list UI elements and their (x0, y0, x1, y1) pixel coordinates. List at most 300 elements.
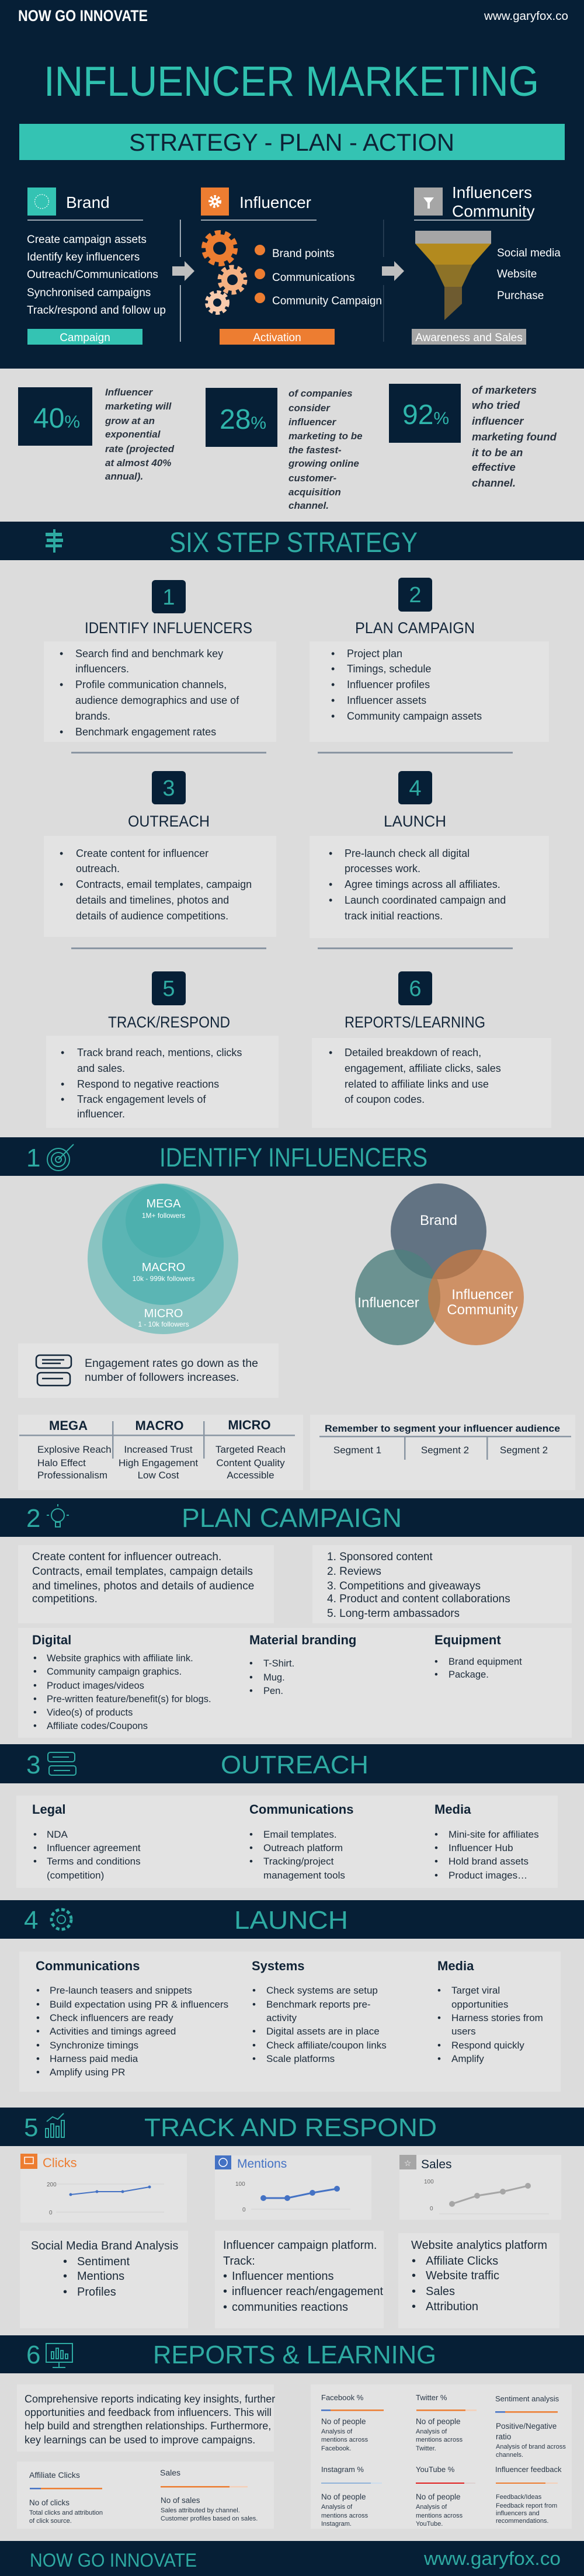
stat 28: acquisition (288, 487, 341, 498)
segment box: Remember to segment your influencer audience (325, 1423, 560, 1434)
step 3: details and timelines, photos and (76, 894, 229, 906)
stat 40: rate (projected (105, 443, 175, 454)
channel metrics: channels. (496, 2452, 523, 2459)
stat 40: 40% (33, 403, 80, 434)
step 2: Community campaign assets (347, 710, 482, 722)
track text 3: • (412, 2300, 416, 2313)
outreach panel: (competition) (47, 1870, 104, 1881)
plan assets panel: Pre-written feature/benefit(s) for blogs. (47, 1694, 211, 1704)
plan intro: competitions. (32, 1593, 98, 1605)
reports intro: help build and strengthen relationships. Furthermore, (25, 2420, 271, 2432)
column: community: Awareness and Sales (415, 332, 523, 344)
track text 1: Social Media Brand Analysis (31, 2240, 178, 2252)
chart: clicks: 0 (49, 2210, 53, 2216)
icon: gear box (201, 188, 229, 216)
launch panel: Digital assets are in place (266, 2026, 380, 2037)
channel metrics: Feedback report from (496, 2502, 557, 2509)
step 4: • (329, 894, 332, 906)
launch header (0, 1900, 584, 1939)
step 3: Contracts, email templates, campaign (76, 879, 252, 890)
plan assets panel: Mug. (263, 1672, 285, 1683)
step 4: • (329, 848, 332, 859)
launch panel: opportunities (451, 1999, 508, 2010)
tier circles: MACRO (142, 1261, 185, 1274)
stat 28: of companies (288, 388, 353, 399)
step 2 (310, 578, 549, 742)
track text 1: Sentiment (77, 2255, 130, 2268)
venn diagram: Influencer (357, 1295, 419, 1311)
chart: clicks: Clicks (43, 2155, 77, 2170)
footer (0, 2541, 584, 2576)
tier table: Increased Trust (124, 1444, 193, 1455)
channel metrics: YouTube % (416, 2465, 455, 2474)
plan header (0, 1498, 584, 1537)
step 3: details of audience competitions. (76, 910, 228, 922)
plan list: 4. Product and content collaborations (327, 1593, 510, 1605)
segment box: Segment 2 (500, 1445, 548, 1456)
plan header: PLAN CAMPAIGN (182, 1503, 402, 1533)
stat 28: customer- (288, 473, 337, 484)
step 3 (44, 771, 276, 937)
step 5: • (61, 1078, 64, 1090)
arrow 1 (172, 261, 194, 281)
plan assets panel: • (249, 1672, 253, 1683)
track header: TRACK AND RESPOND (144, 2113, 437, 2142)
affiliate & sales metrics: Sales (160, 2468, 180, 2477)
engagement note (18, 1343, 279, 1398)
step 4: Pre-launch check all digital (345, 848, 470, 859)
launch panel: • (36, 2012, 40, 2023)
step 2: Influencer profiles (347, 679, 430, 690)
stat 40: annual). (105, 471, 143, 482)
track text 2 (215, 2231, 384, 2328)
column: community (412, 183, 561, 345)
outreach panel: Tracking/project (263, 1856, 334, 1867)
step 1 (44, 580, 276, 742)
outreach panel: Influencer agreement (47, 1842, 141, 1853)
plan list: 5. Long-term ambassadors (327, 1608, 460, 1620)
track text 3: • (412, 2285, 416, 2298)
identify header: IDENTIFY INFLUENCERS (159, 1143, 427, 1172)
tier table: High Engagement (119, 1457, 198, 1468)
stat 28: 28% (220, 404, 266, 435)
step 3: Create content for influencer (76, 848, 208, 859)
step 5: 5 (162, 977, 175, 1001)
outreach header: OUTREACH (221, 1751, 369, 1779)
outreach panel: Influencer Hub (449, 1842, 513, 1853)
step 5: Respond to negative reactions (77, 1078, 219, 1090)
stat 92 (389, 384, 557, 489)
tier circles (88, 1183, 238, 1334)
segment box (310, 1415, 575, 1490)
step 4: 4 (409, 776, 422, 801)
stat 92: effective (472, 461, 516, 473)
step 3: • (60, 848, 63, 859)
channel metrics: Instagram % (321, 2465, 364, 2474)
launch panel: • (437, 2053, 441, 2064)
step 1: IDENTIFY INFLUENCERS (85, 619, 252, 637)
plan assets panel: • (33, 1653, 37, 1664)
tier table: MACRO (135, 1418, 184, 1433)
launch panel: • (252, 2040, 256, 2051)
chart: clicks (20, 2154, 187, 2223)
column: brand: Identify key influencers (27, 251, 140, 263)
outreach panel: • (249, 1842, 253, 1853)
track text 1: • (63, 2255, 67, 2268)
outreach header: 3 (26, 1751, 40, 1779)
outreach panel: • (249, 1829, 253, 1840)
plan list (312, 1545, 572, 1623)
step 2: • (331, 663, 335, 675)
step 5: Track engagement levels of (77, 1093, 206, 1105)
tier table: MEGA (49, 1418, 88, 1433)
chart: sales: Sales (421, 2158, 452, 2171)
chart: sales: 100 (424, 2179, 434, 2185)
launch panel: Media (437, 1959, 474, 1973)
venn diagram: Brand (420, 1213, 457, 1228)
track text 3 (398, 2233, 559, 2328)
engagement note: number of followers increases. (85, 1371, 239, 1384)
tier table (18, 1415, 303, 1490)
chart: mentions: 0 (242, 2207, 246, 2213)
stat 92: of marketers (472, 384, 537, 396)
track text 3: Affiliate Clicks (426, 2255, 498, 2268)
tier table: Accessible (227, 1470, 274, 1481)
track text 2: influencer reach/engagement (232, 2285, 384, 2298)
chart: mentions (215, 2155, 371, 2220)
launch panel: Respond quickly (451, 2040, 524, 2051)
icon: bulb (47, 1504, 69, 1527)
outreach panel: • (249, 1856, 253, 1867)
channel metrics: recommendations. (496, 2518, 549, 2525)
affiliate & sales metrics: Affiliate Clicks (29, 2470, 80, 2480)
plan assets panel: Video(s) of products (47, 1707, 133, 1718)
segment box: Segment 1 (333, 1445, 381, 1456)
column: influencer: Community Campaign (272, 295, 382, 307)
plan assets panel: Pen. (263, 1686, 283, 1696)
footer: NOW GO INNOVATE (30, 2550, 197, 2571)
launch panel (19, 1952, 561, 2092)
channel metrics: mentions across (416, 2436, 463, 2443)
column: influencer: Communications (272, 272, 355, 284)
plan assets panel: • (33, 1707, 37, 1718)
channel metrics: Twitter. (416, 2445, 436, 2452)
reports header: 6 (26, 2341, 40, 2369)
launch panel: Pre-launch teasers and snippets (50, 1985, 192, 1996)
track text 3: • (412, 2269, 416, 2282)
stats panel (18, 384, 557, 511)
tier circles: MICRO (144, 1307, 183, 1320)
plan list: 1. Sponsored content (327, 1551, 433, 1563)
venn diagram: Influencer (451, 1287, 513, 1303)
chart: mentions: 100 (235, 2181, 245, 2188)
step 6: of coupon codes. (345, 1093, 425, 1105)
launch panel: • (36, 2053, 40, 2064)
outreach panel: Mini-site for affiliates (449, 1829, 539, 1840)
header brand: NOW GO INNOVATE (18, 7, 148, 25)
track text 3: Sales (426, 2285, 455, 2298)
stat 92: influencer (472, 415, 524, 427)
affiliate & sales metrics: of click source. (29, 2518, 72, 2525)
outreach panel: • (434, 1870, 438, 1881)
launch header: LAUNCH (234, 1906, 348, 1935)
step 2: Project plan (347, 648, 402, 659)
launch panel: Benchmark reports pre- (266, 1999, 371, 2010)
stat 28: growing online (288, 458, 359, 469)
step 4: • (329, 879, 332, 890)
track text 2: • (223, 2270, 227, 2283)
step 3: outreach. (76, 863, 120, 874)
plan assets panel: • (249, 1686, 253, 1696)
banner (19, 124, 565, 160)
launch panel: • (36, 2040, 40, 2051)
channel metrics: Analysis of (416, 2428, 447, 2435)
icon: gear (51, 1910, 71, 1929)
step 1: Profile communication channels, (75, 679, 227, 690)
track text 3: Attribution (426, 2300, 478, 2313)
channel metrics: Instagram. (321, 2521, 352, 2528)
step 1: Search find and benchmark key (75, 648, 223, 659)
stat 40: marketing will (105, 401, 172, 412)
affiliate & sales metrics: Total clicks and attribution (29, 2509, 103, 2516)
reports intro: key learnings can be used to improve campaigns. (25, 2434, 255, 2446)
launch panel: Scale platforms (266, 2053, 335, 2064)
track text 2: communities reactions (232, 2301, 348, 2314)
track text 1: • (63, 2286, 67, 2299)
stat 28: the fastest- (288, 445, 342, 456)
stat 40: grow at an (105, 415, 155, 426)
column: brand: Brand (66, 193, 110, 211)
tier table: Halo Effect (37, 1457, 86, 1468)
column: community: Social media (497, 247, 561, 259)
six step header (0, 522, 584, 560)
step 6: Detailed breakdown of reach, (345, 1047, 481, 1058)
step 2: Timings, schedule (347, 663, 431, 675)
stat 40 (18, 387, 175, 482)
column: influencer (201, 188, 382, 345)
stat 28: marketing to be (288, 431, 363, 442)
channel metrics: Feedback/Ideas (496, 2494, 542, 2501)
tier circles: 10k - 999k followers (133, 1275, 194, 1283)
channel metrics: Analysis of (416, 2504, 447, 2511)
stat 40: at almost 40% (105, 457, 171, 468)
launch panel: Amplify using PR (50, 2067, 125, 2078)
step 2: • (331, 648, 335, 659)
plan assets panel: Brand equipment (449, 1657, 522, 1667)
channel metrics: influencers and (496, 2510, 540, 2517)
outreach panel: Media (434, 1802, 471, 1817)
venn diagram (355, 1183, 524, 1345)
track header (0, 2108, 584, 2146)
track text 1: Profiles (77, 2286, 116, 2299)
affiliate & sales metrics: No of clicks (29, 2498, 69, 2507)
plan assets panel (18, 1628, 572, 1738)
plan assets panel: • (33, 1721, 37, 1731)
step 6: REPORTS/LEARNING (345, 1013, 485, 1031)
channel metrics (311, 2384, 572, 2529)
column: community: Community (452, 202, 535, 220)
step 4 (310, 771, 549, 938)
channel metrics: Facebook % (321, 2393, 364, 2402)
icon: chart (46, 2113, 64, 2137)
stat 92: marketing found (472, 431, 557, 443)
launch panel: Activities and timings agreed (50, 2026, 176, 2037)
step 6 (312, 971, 551, 1128)
step 2: • (331, 710, 335, 722)
plan assets panel: Community campaign graphics. (47, 1667, 182, 1677)
icon: funnel (415, 231, 491, 320)
tier table: Targeted Reach (215, 1444, 286, 1455)
tier table: Content Quality (216, 1457, 285, 1468)
chart: clicks: 200 (47, 2182, 57, 2188)
track text 1 (20, 2231, 188, 2328)
launch panel: Communications (36, 1959, 140, 1973)
outreach panel: • (434, 1842, 438, 1853)
venn diagram: Community (447, 1302, 518, 1318)
launch panel: Check influencers are ready (50, 2012, 173, 2023)
step 1: brands. (75, 710, 110, 722)
outreach panel: Legal (32, 1802, 65, 1817)
banner: STRATEGY - PLAN - ACTION (129, 129, 454, 156)
icon: gears (204, 232, 245, 313)
column: brand: Synchronised campaigns (27, 287, 151, 299)
column: influencer: Brand points (272, 248, 335, 260)
plan assets panel: Package. (449, 1669, 489, 1680)
launch panel: users (451, 2026, 476, 2037)
step 6: 6 (409, 977, 422, 1001)
column: brand (27, 188, 166, 345)
plan assets panel: • (33, 1681, 37, 1691)
column: brand: Track/respond and follow up (27, 304, 166, 317)
outreach panel: • (434, 1829, 438, 1840)
track text 1: Mentions (77, 2270, 124, 2283)
outreach panel: Email templates. (263, 1829, 337, 1840)
step 3: OUTREACH (128, 813, 210, 830)
track text 3: • (412, 2255, 416, 2268)
tier circles: 1 - 10k followers (138, 1320, 189, 1328)
launch panel: • (437, 2040, 441, 2051)
column: community: Website (497, 268, 537, 280)
outreach panel: • (33, 1856, 37, 1867)
launch panel: • (252, 1999, 256, 2010)
plan list: 2. Reviews (327, 1565, 381, 1578)
stat 40: exponential (105, 429, 161, 440)
step 2: • (331, 695, 335, 706)
channel metrics: Analysis of (321, 2428, 353, 2435)
stat 28: influencer (288, 416, 337, 428)
chart: mentions: Mentions (237, 2157, 287, 2171)
launch panel: • (36, 2026, 40, 2037)
icon: signpost (46, 529, 63, 553)
launch panel: • (252, 2053, 256, 2064)
arrow 2 (382, 261, 404, 281)
launch panel: Check systems are setup (266, 1985, 378, 1996)
column: community: Influencers (452, 183, 532, 202)
plan intro: Create content for influencer outreach. (32, 1551, 221, 1563)
step 1: • (60, 726, 63, 738)
stat 28: consider (288, 402, 331, 414)
step 4: Agree timings across all affiliates. (345, 879, 500, 890)
reports intro (17, 2384, 275, 2452)
track text 3: Website traffic (426, 2269, 499, 2282)
outreach panel: Hold brand assets (449, 1856, 529, 1867)
step 5: • (61, 1047, 64, 1058)
chart: sales: ☆ (404, 2158, 411, 2168)
step 3: 3 (162, 776, 175, 801)
track text 2: Track: (223, 2255, 255, 2268)
step 2: PLAN CAMPAIGN (355, 619, 475, 637)
header url: www.garyfox.co (484, 10, 568, 23)
channel metrics: Influencer feedback (495, 2465, 562, 2474)
step 1: influencers. (75, 663, 129, 675)
channel metrics: mentions across (321, 2512, 369, 2519)
icon: target (47, 1144, 74, 1171)
step 6: engagement, affiliate clicks, sales (345, 1063, 501, 1074)
step 6: related to affiliate links and use (345, 1078, 489, 1090)
column: brand: Outreach/Communications (27, 269, 158, 281)
launch panel: Amplify (451, 2053, 484, 2064)
outreach panel: NDA (47, 1829, 68, 1840)
outreach header (0, 1744, 584, 1783)
tier table: Low Cost (138, 1470, 179, 1481)
column: influencer: Influencer (239, 193, 311, 211)
six step header: SIX STEP STRATEGY (169, 527, 418, 558)
step 1: 1 (162, 585, 175, 610)
launch panel: • (437, 1985, 441, 1996)
step 4: track initial reactions. (345, 910, 443, 922)
outreach panel: • (33, 1842, 37, 1853)
outreach panel: Communications (249, 1802, 353, 1817)
launch panel: • (252, 1985, 256, 1996)
track text 1: • (63, 2270, 67, 2283)
icon: chat (48, 1752, 76, 1775)
outreach panel: Product images… (449, 1870, 527, 1881)
track text 2: • (223, 2301, 227, 2314)
step 5: TRACK/RESPOND (108, 1013, 230, 1031)
reports intro: opportunities and feedback from influencers. This will (25, 2407, 272, 2418)
stat 40: Influencer (105, 387, 154, 398)
plan intro: Contracts, email templates, campaign details (32, 1565, 253, 1578)
step 5 (46, 971, 279, 1128)
launch panel: Harness stories from (451, 2012, 543, 2023)
icon: chat (36, 1355, 71, 1386)
icon: funnel box (414, 188, 443, 216)
icon: monitor (46, 2344, 72, 2367)
channel metrics: No of people (416, 2492, 461, 2501)
launch header: 4 (24, 1906, 38, 1935)
stat 92: it to be an (472, 446, 523, 459)
launch panel: • (437, 2012, 441, 2023)
chart: sales (399, 2155, 561, 2220)
launch panel: Synchronize timings (50, 2040, 138, 2051)
step 2: Influencer assets (347, 695, 426, 706)
plan assets panel: Website graphics with affiliate link. (47, 1653, 193, 1664)
plan assets panel: T-Shirt. (263, 1658, 294, 1669)
segment box: Segment 2 (421, 1445, 469, 1456)
plan assets panel: Material branding (249, 1633, 356, 1647)
column: community: Purchase (497, 290, 544, 302)
outreach panel: • (434, 1856, 438, 1867)
track text 2: • (223, 2285, 227, 2298)
title: INFLUENCER MARKETING (44, 58, 539, 105)
identify header: 1 (26, 1144, 40, 1172)
outreach panel: • (33, 1829, 37, 1840)
step 1: Benchmark engagement rates (75, 726, 216, 738)
track text 2: Influencer campaign platform. (223, 2239, 377, 2252)
hero panel (0, 0, 584, 369)
channel metrics: No of people (321, 2417, 366, 2426)
launch panel: • (36, 1999, 40, 2010)
